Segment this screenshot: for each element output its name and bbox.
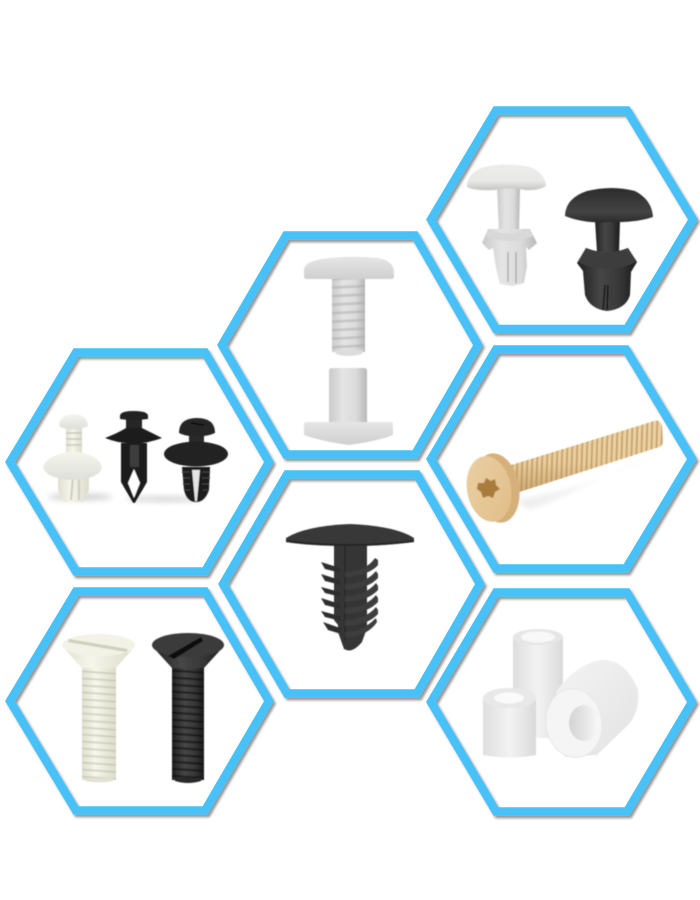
panel: hexagon frame upper centre <box>222 236 478 454</box>
icon: white tall spacer (bottom right) <box>513 629 563 738</box>
icon: white rivet (middle left) <box>43 414 112 502</box>
panel: hexagon frame bottom right <box>431 592 692 812</box>
panel: hexagon frame top right <box>431 110 693 329</box>
icon: black fir-tree clip (lower centre) <box>286 524 414 650</box>
icon: white short spacer (bottom right) <box>483 688 536 758</box>
panel: hexagon frame middle left <box>10 352 269 572</box>
icon: black pin clip (middle left) <box>105 411 205 503</box>
icon: black push clip (top right) <box>565 188 653 311</box>
icon: grey screw top (upper centre) <box>304 257 394 356</box>
icon: grey sleeve nut (upper centre) <box>304 368 393 445</box>
panel: hexagon frame bottom left <box>10 592 269 810</box>
icon: white large spacer on its side (bottom right) <box>541 660 638 761</box>
panel: hexagon frame lower centre <box>223 474 480 694</box>
icon: black ribbed clip (middle left) <box>164 418 228 502</box>
panel: hexagon frame middle right <box>431 350 692 568</box>
icon: ivory slotted countersunk screw (bottom left) <box>62 634 135 782</box>
icon: tan long screw (middle right) <box>462 421 663 526</box>
icon: black slotted countersunk screw (bottom left) <box>152 633 224 783</box>
icon: white push clip (top right) <box>467 164 546 286</box>
